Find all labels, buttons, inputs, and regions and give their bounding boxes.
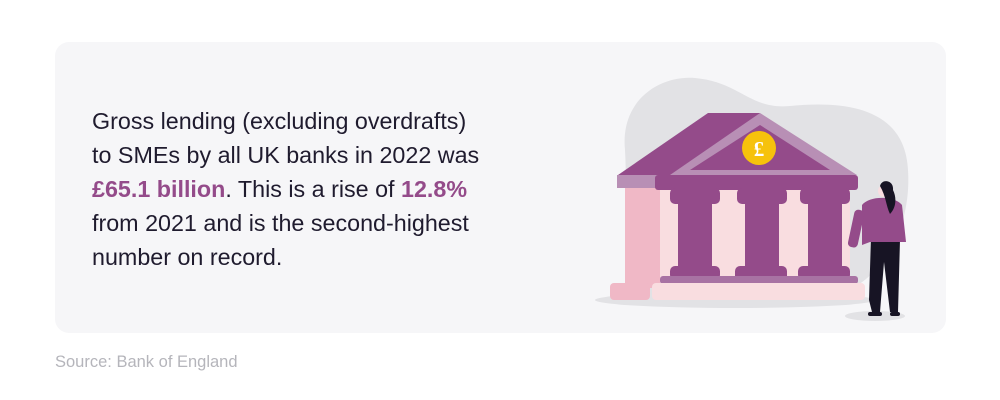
- panel: main card: [55, 42, 946, 333]
- text block: statistic: [92, 108, 479, 270]
- shadow: [595, 292, 875, 308]
- icon: bank building: [610, 113, 865, 300]
- text block: statistic: number on record.: [92, 244, 282, 270]
- text block: statistic: Gross lending (excluding overdrafts): [92, 108, 466, 134]
- text block: statistic: £65.1 billion. This is a rise of 12.8%: [92, 176, 467, 202]
- source note: Source: Bank of England: [55, 353, 238, 371]
- text block: statistic: from 2021 and is the second-highest: [92, 210, 469, 236]
- icon: pound coin: [742, 131, 776, 165]
- person: [847, 181, 906, 316]
- icon: bank building: £: [754, 137, 764, 161]
- background blob: [625, 78, 908, 300]
- text block: statistic: to SMEs by all UK banks in 2022 was: [92, 142, 479, 168]
